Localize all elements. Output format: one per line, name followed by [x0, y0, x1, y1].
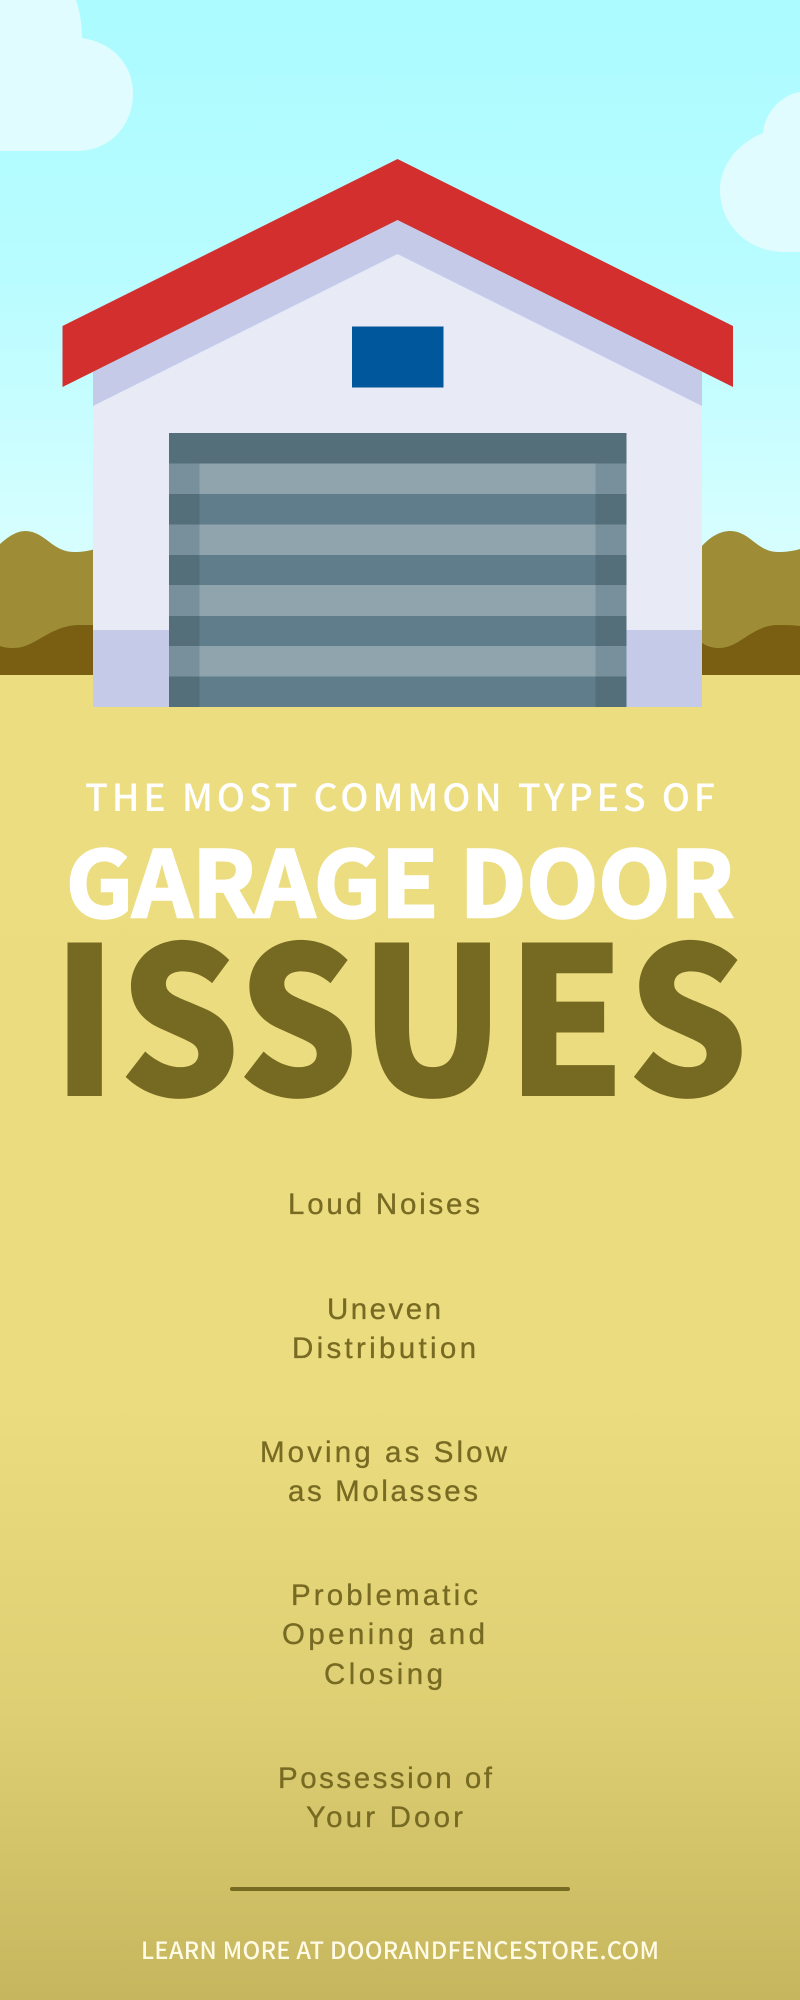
wall	[93, 254, 702, 707]
item: moving as slow as molasses: as Molasses	[288, 1475, 478, 1508]
footer divider	[230, 1887, 570, 1891]
item: problematic opening and closing: Opening and	[282, 1618, 485, 1651]
roof	[62, 159, 733, 387]
garage house	[62, 159, 733, 707]
wall plinths	[93, 630, 702, 707]
item: problematic opening and closing: Closing	[324, 1658, 443, 1691]
sky background	[0, 0, 800, 680]
item: possession of your door: Possession of	[278, 1762, 493, 1795]
item: problematic opening and closing	[282, 1579, 485, 1691]
item: possession of your door: Your Door	[306, 1801, 463, 1834]
item: uneven distribution	[292, 1293, 476, 1365]
garage door	[169, 433, 626, 707]
title: the most common types of: THE MOST COMMON TYPES OF	[85, 767, 715, 822]
door side rails	[169, 464, 626, 707]
item: loud noises: Loud Noises	[288, 1188, 480, 1221]
item: moving as slow as molasses: Moving as Slow	[260, 1436, 508, 1469]
ground	[0, 675, 800, 2000]
gable shadow band	[93, 220, 702, 406]
title: issues: ISSUES	[51, 858, 749, 1156]
cloud: top right	[720, 92, 800, 252]
title: garage door: GARAGE DOOR	[66, 812, 734, 944]
issue list	[260, 1188, 508, 1834]
footer link text: LEARN MORE AT DOORANDFENCESTORE.COM	[141, 1932, 659, 1966]
item: uneven distribution: Uneven	[327, 1293, 441, 1326]
item: problematic opening and closing: Problematic	[291, 1579, 478, 1612]
item: possession of your door	[278, 1762, 493, 1834]
hills: back	[0, 531, 800, 680]
hills: front	[0, 625, 800, 680]
cloud: top left	[0, 0, 133, 151]
item: moving as slow as molasses	[260, 1436, 508, 1508]
window	[352, 326, 444, 388]
item: uneven distribution: Distribution	[292, 1332, 476, 1365]
